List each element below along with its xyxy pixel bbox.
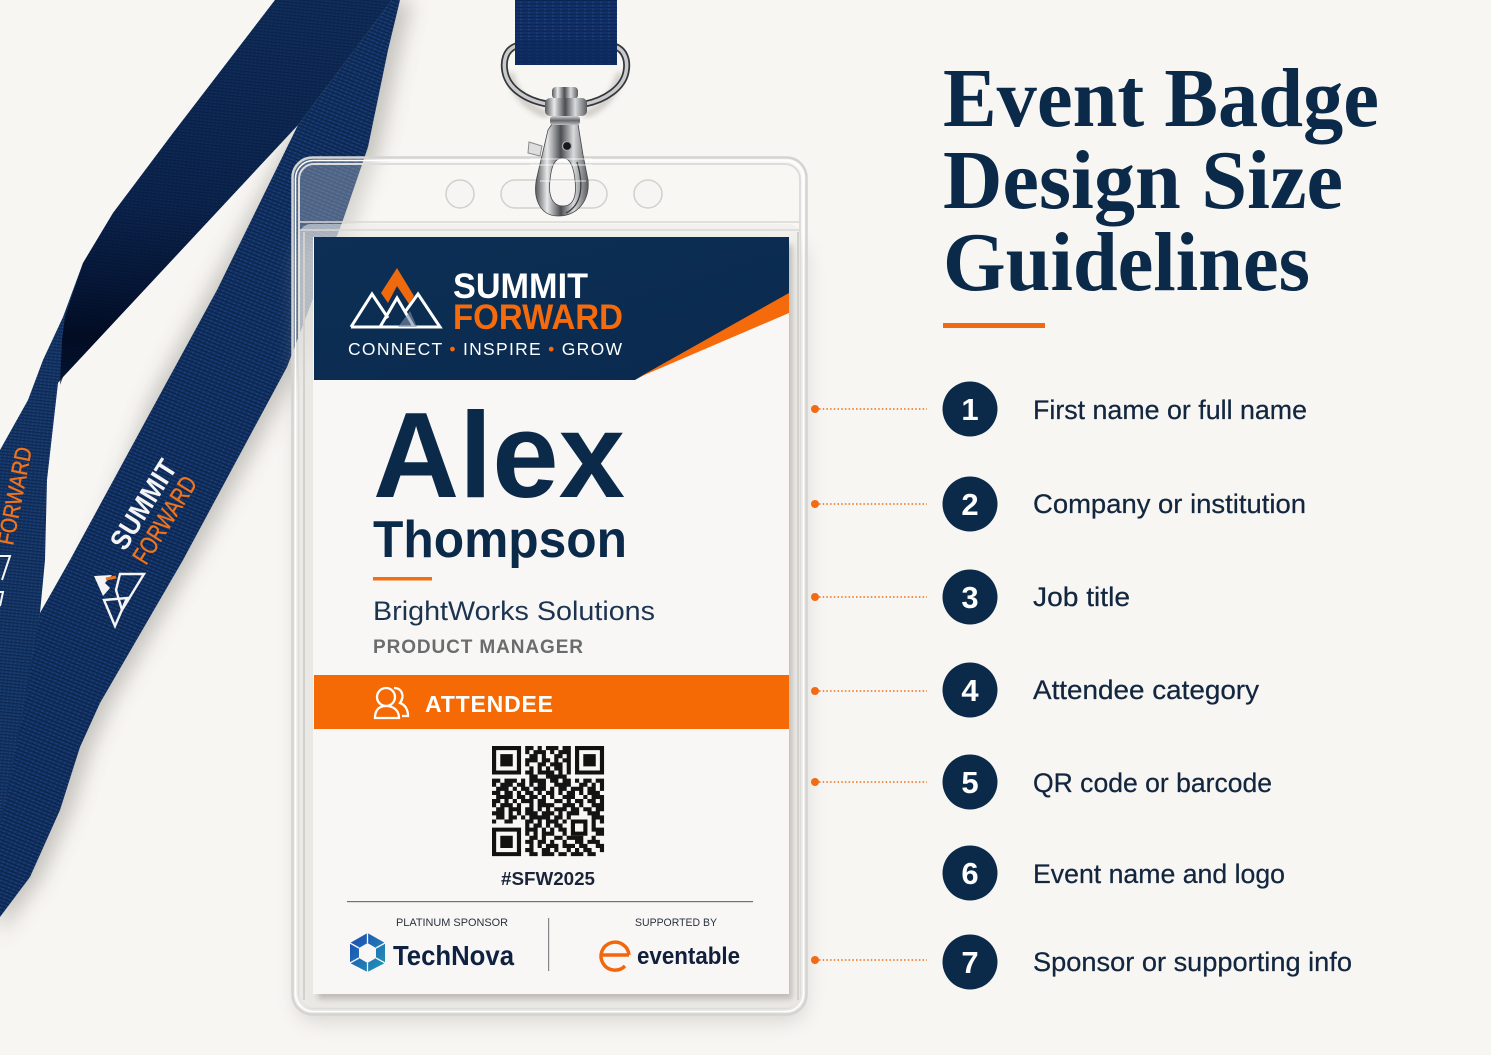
lanyard print: SUMMIT: SUMMIT xyxy=(104,454,183,555)
punched holes xyxy=(446,180,662,208)
TechNova: TechNova xyxy=(393,940,514,971)
sponsor block xyxy=(350,917,740,972)
badge number 4: 4 xyxy=(961,673,979,708)
D ring xyxy=(504,46,627,104)
leader 4 xyxy=(811,687,927,695)
hashtag: #SFW2025 xyxy=(501,869,595,889)
strap end xyxy=(515,0,617,65)
supported label: SUPPORTED BY xyxy=(635,917,718,929)
badge number 7 xyxy=(942,934,998,990)
FORWARD: FORWARD xyxy=(453,298,623,337)
swivel collar xyxy=(545,98,587,116)
badge number 1: 1 xyxy=(961,392,979,427)
gate line xyxy=(566,162,581,213)
carabiner hook xyxy=(528,87,592,216)
badge number 6: 6 xyxy=(961,856,979,891)
item 1 xyxy=(811,382,1307,436)
top strap and metal ring xyxy=(504,0,627,115)
label 6: Event name and logo xyxy=(1033,859,1285,889)
item 7 xyxy=(811,934,1352,990)
tagline: CONNECT • INSPIRE • GROW xyxy=(348,339,622,359)
lanyard print: left logo fragment xyxy=(0,556,10,606)
lanyard print: FORWARD: FORWARD xyxy=(127,471,203,569)
badge number 6 xyxy=(942,846,998,900)
badge number 1 xyxy=(942,382,998,436)
leader 5 xyxy=(811,778,927,786)
badge number 3 xyxy=(942,570,998,624)
leader 2 xyxy=(811,500,927,508)
icon: people xyxy=(375,688,408,718)
title xyxy=(943,52,1379,309)
attendee surname: Thompson xyxy=(373,511,627,569)
vertical divider xyxy=(548,918,549,971)
plastic highlights over hook xyxy=(530,159,592,181)
badge holder xyxy=(292,158,806,1022)
attendee first name: Alex xyxy=(373,387,625,523)
badge number 7: 7 xyxy=(961,945,979,980)
card shadow xyxy=(318,245,792,999)
ATTENDEE: ATTENDEE xyxy=(425,691,553,717)
pocket body xyxy=(299,224,800,1008)
swivel cap xyxy=(552,87,578,99)
card paper xyxy=(313,237,789,994)
badge number 4 xyxy=(942,662,998,718)
item 6 xyxy=(942,846,1285,900)
label 5: QR code or barcode xyxy=(1033,768,1272,798)
item 4 xyxy=(811,662,1260,718)
swivel neck xyxy=(550,116,580,125)
navy header shape xyxy=(314,237,789,380)
platinum label: PLATINUM SPONSOR xyxy=(396,917,508,929)
badge card xyxy=(313,237,792,999)
job title: PRODUCT MANAGER xyxy=(373,637,583,658)
badge header xyxy=(314,237,789,380)
event logo xyxy=(351,268,440,327)
clip shadow xyxy=(510,73,620,115)
label 7: Sponsor or supporting info xyxy=(1033,947,1352,977)
label 4: Attendee category xyxy=(1033,675,1260,705)
badge number 2: 2 xyxy=(961,487,979,522)
label 3: Job title xyxy=(1033,582,1130,612)
holder shadow xyxy=(296,240,806,1022)
label 2: Company or institution xyxy=(1033,489,1306,519)
pivot hole xyxy=(562,142,572,150)
strap: lower right band xyxy=(0,0,400,917)
strap: upper left band xyxy=(0,0,392,827)
lanyard straps xyxy=(0,0,412,935)
eventable: eventable xyxy=(637,943,740,970)
icon: hexagon xyxy=(350,933,385,972)
title line 3: Guidelines xyxy=(943,216,1310,309)
inner edges xyxy=(304,232,798,1000)
badge number 5 xyxy=(942,754,998,810)
title underline xyxy=(943,323,1045,328)
hook loop and body xyxy=(536,124,588,216)
clear plastic sleeve xyxy=(292,158,806,1014)
badge number 3: 3 xyxy=(961,580,979,615)
leader 1 xyxy=(811,405,927,413)
category band xyxy=(314,675,789,729)
item 5 xyxy=(811,754,1272,810)
item 3 xyxy=(811,570,1130,624)
icon: orange e xyxy=(601,942,629,970)
label 1: First name or full name xyxy=(1033,395,1307,425)
orange rule xyxy=(373,577,432,580)
badge number 5: 5 xyxy=(961,765,979,800)
SUMMIT: SUMMIT xyxy=(453,267,588,306)
QR code xyxy=(492,746,604,856)
lanyard print: logo xyxy=(94,574,144,626)
leader 3 xyxy=(811,593,927,601)
trigger pin xyxy=(528,142,542,156)
orange swoosh xyxy=(634,293,789,380)
strap: shaded upper fold xyxy=(60,0,392,385)
sponsor divider xyxy=(347,901,753,902)
orange band xyxy=(314,675,789,729)
item 2 xyxy=(811,476,1306,532)
company: BrightWorks Solutions xyxy=(373,596,655,626)
title line 1: Event Badge xyxy=(943,52,1379,145)
leader 7 xyxy=(811,956,927,964)
title line 2: Design Size xyxy=(943,134,1343,227)
badge number 2 xyxy=(942,476,998,532)
